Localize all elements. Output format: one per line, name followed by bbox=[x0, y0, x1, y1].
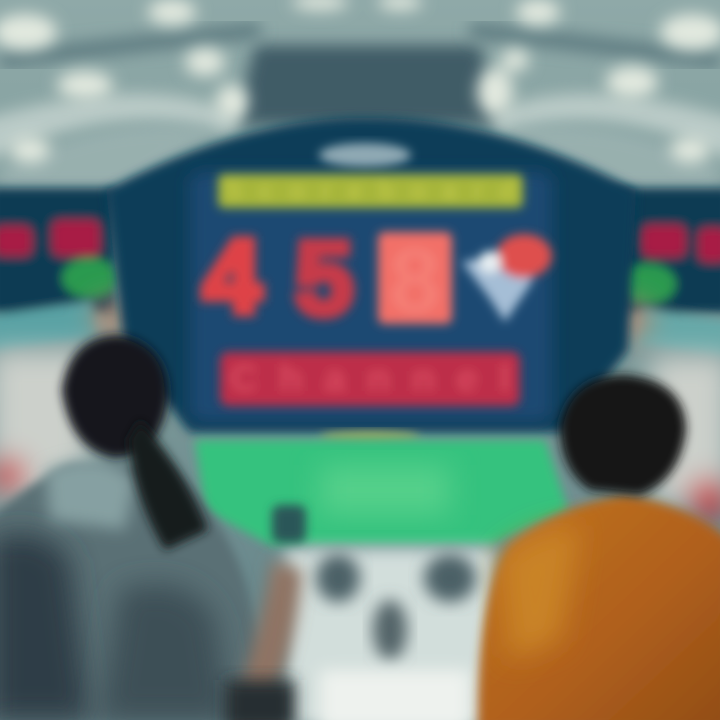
lower side stands bbox=[0, 300, 720, 518]
orange jacket bbox=[478, 495, 720, 720]
scoreboard footer banner: Channel bbox=[230, 358, 510, 400]
arm and phone bbox=[240, 560, 302, 700]
flag badge bbox=[462, 234, 552, 322]
jacket bbox=[0, 465, 280, 720]
side scoreboard: right bbox=[610, 188, 720, 357]
score digits: 5 bbox=[295, 221, 353, 337]
score digits bbox=[203, 219, 452, 337]
scoreboard header: Scoreboard bbox=[225, 175, 515, 205]
green pitch bbox=[195, 440, 568, 545]
score digits: 8 bbox=[389, 230, 441, 332]
seating and floor below pitch bbox=[285, 548, 495, 720]
spectator: man on right bbox=[478, 375, 720, 720]
ceiling lights bbox=[0, 0, 720, 163]
side scoreboard: left bbox=[0, 188, 118, 351]
spectator: woman on left bbox=[0, 335, 306, 720]
head bbox=[560, 375, 686, 495]
score digits: 4 bbox=[203, 219, 261, 335]
hair bbox=[62, 335, 168, 458]
main scoreboard panel bbox=[106, 118, 636, 443]
